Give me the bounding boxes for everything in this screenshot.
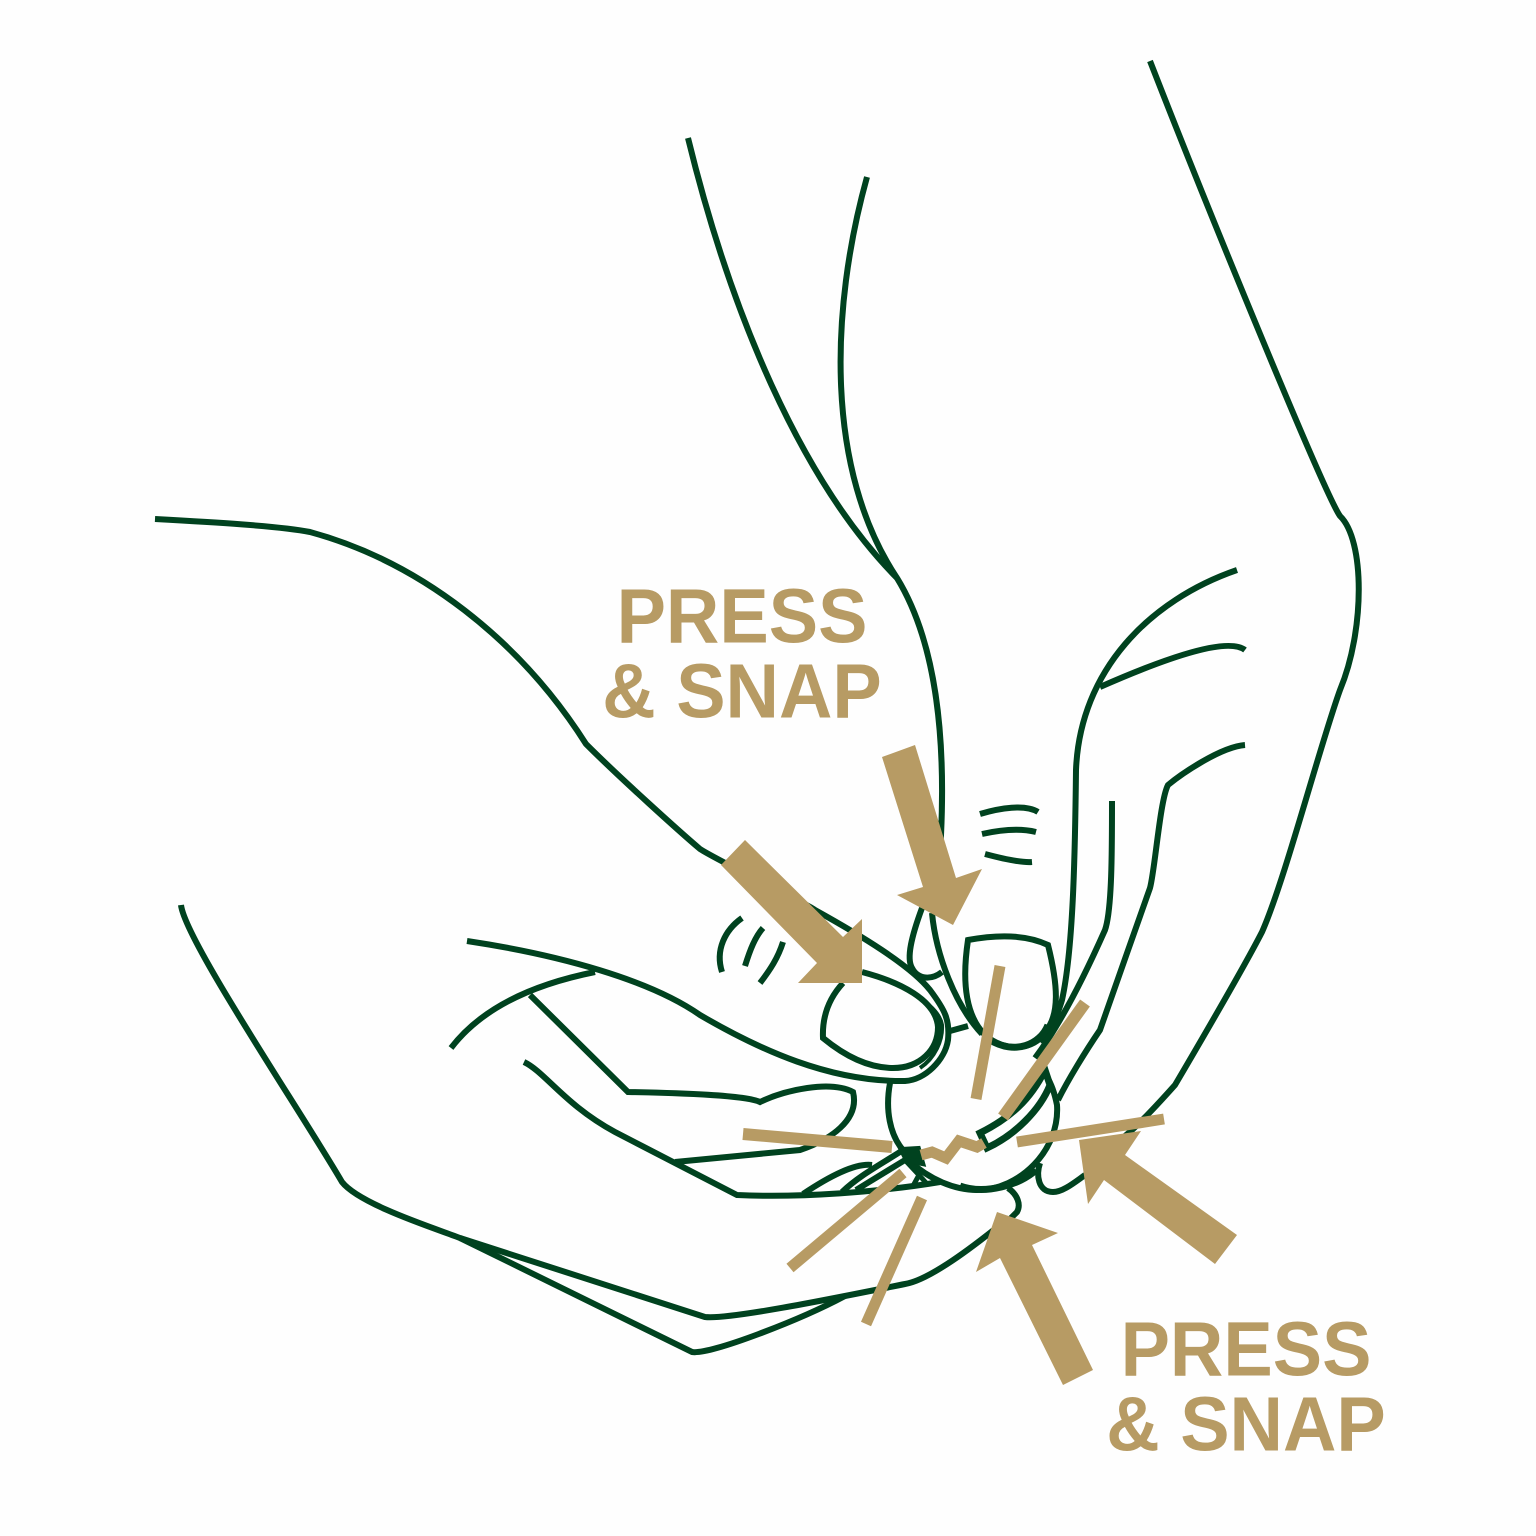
- motion lines: top: [980, 808, 1038, 862]
- label: upper press and snap: [602, 573, 882, 734]
- arrow: lower right: [1079, 1131, 1237, 1264]
- capsule: [888, 1070, 1057, 1190]
- arrow: lower bottom: [976, 1212, 1093, 1385]
- snap rays: [743, 966, 1164, 1324]
- left hand line art: [155, 519, 1019, 1352]
- label: upper press and snap: PRESS: [617, 573, 867, 659]
- right hand line art: [688, 61, 1359, 1192]
- arrow: upper left: [721, 840, 862, 983]
- label: lower press and snap: PRESS: [1121, 1306, 1371, 1392]
- label: lower press and snap: & SNAP: [1106, 1381, 1386, 1467]
- arrow: upper top: [882, 745, 982, 925]
- label: lower press and snap: [1106, 1306, 1386, 1467]
- motion lines: left: [720, 918, 783, 983]
- capsule crack: [921, 1141, 984, 1158]
- label: upper press and snap: & SNAP: [602, 648, 882, 734]
